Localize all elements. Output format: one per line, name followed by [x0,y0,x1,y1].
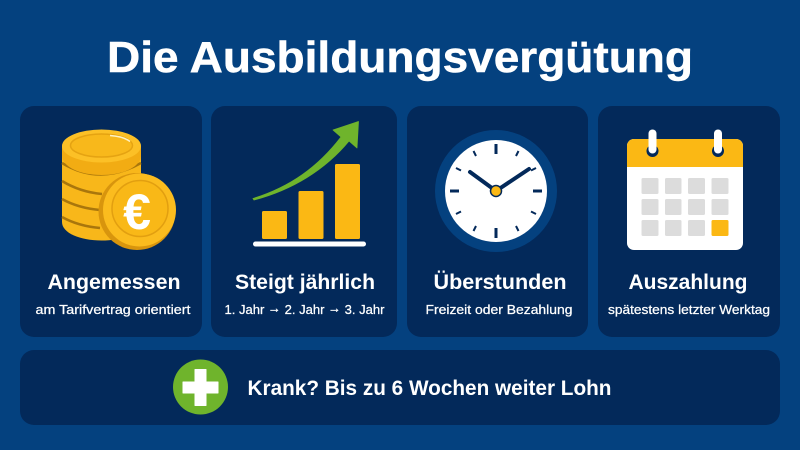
icon: rising bar chart [253,122,366,246]
heading: Überstunden [434,271,566,294]
heading: Angemessen [48,271,180,294]
icon: euro coins [62,130,176,250]
title: Die Ausbildungsvergütung [107,33,693,82]
text: 2. Jahr [281,302,328,317]
text: → [268,300,281,316]
text: am Tarifvertrag orientiert [36,302,191,317]
heading: Steigt jährlich [235,271,375,294]
text: 1. Jahr [224,302,264,317]
icon: green cross [173,360,228,414]
panel: Angemessen [20,106,202,337]
icon: euro coins: € [123,184,151,240]
panel: sick pay banner [20,350,780,425]
panel: Auszahlung [598,106,780,337]
panel: Steigt jährlich [211,106,397,337]
callout text: Krank? Bis zu 6 Wochen weiter Lohn [248,377,612,400]
icon: calendar [627,130,743,250]
text: → [328,300,341,316]
icon: clock [435,130,557,252]
heading: Auszahlung [628,271,748,294]
text: 3. Jahr [341,302,385,317]
panel: Überstunden [407,106,588,337]
text: spätestens letzter Werktag [608,302,770,317]
text: Freizeit oder Bezahlung [426,302,572,317]
